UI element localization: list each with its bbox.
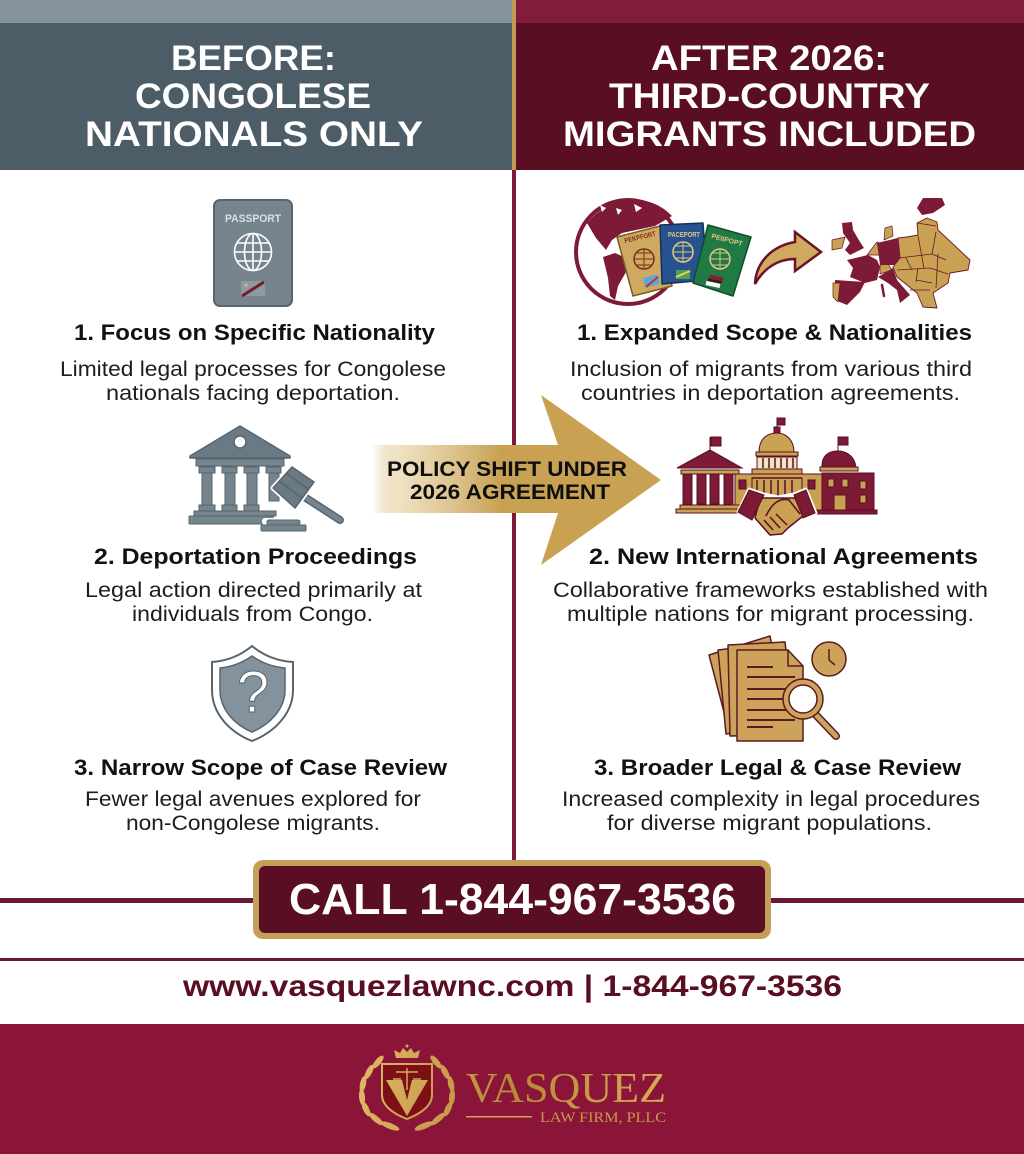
arrow label: 2026 AGREEMENT [410,481,610,504]
icon: government buildings and handshake [676,418,877,536]
text block: deportation proceedings: individuals from Congo. [132,603,373,626]
icon: globe with passports [576,200,751,304]
icon: europe map [832,198,970,308]
logo: wordmark: LAW FIRM, PLLC [540,1110,666,1126]
passport: blue: PACEPORT [668,232,701,239]
text block: deportation proceedings [85,544,422,626]
panel: before header [0,0,512,170]
passport: gold: PEKPFORT [624,231,657,245]
text block: new international agreements: 2. New International Agreements [589,544,978,569]
passport: green: PEIIPOPT [710,233,744,248]
arrow label: POLICY SHIFT UNDER [387,458,627,481]
heading: before: NATIONALS ONLY [85,115,423,154]
text block: broader legal and case review: for diverse migrant populations. [607,812,932,835]
text block: narrow scope of case review [74,755,448,835]
text block: expanded scope: 1. Expanded Scope & Nationalities [577,320,972,345]
heading: after [563,39,976,154]
logo: crest [358,1044,456,1133]
text block: deportation proceedings: Legal action directed primarily at [85,579,422,602]
heading: before: CONGOLESE [135,77,371,116]
text block: narrow scope of case review: Fewer legal avenues explored for [85,788,421,811]
text block: focus on specific nationality: 1. Focus on Specific Nationality [74,320,436,345]
arrow: policy shift [372,395,661,565]
icon: documents, clock and magnifier [709,636,846,741]
passport: blue [660,223,707,284]
text block: focus on specific nationality: Limited legal processes for Congolese [60,358,446,381]
call to action button [253,860,771,939]
passport: green [693,225,751,296]
text block: narrow scope of case review: non-Congolese migrants. [126,812,380,835]
text block: broader legal and case review: Increased complexity in legal procedures [562,788,980,811]
text block: narrow scope of case review: 3. Narrow Scope of Case Review [74,755,448,780]
panel: after header [516,0,1024,170]
text block: broader legal and case review: 3. Broader Legal & Case Review [594,755,962,780]
right building [815,437,877,514]
handshake [738,489,816,536]
footer band [0,1024,1024,1154]
icon: shield with question mark: ? [237,660,269,725]
text block: new international agreements: multiple nations for migrant processing. [567,603,974,626]
heading: after: MIGRANTS INCLUDED [563,115,976,154]
text block: expanded scope: countries in deportation agreements. [581,382,960,405]
icon: grey passport: PASSPORT [225,213,281,225]
text block: expanded scope: Inclusion of migrants from various third [570,358,972,381]
heading: before [85,39,423,154]
text block: new international agreements [553,544,988,626]
call to action button: CALL 1-844-967-3536 [289,875,736,924]
passport: gold [617,226,672,296]
contact line: www.vasquezlawnc.com | 1-844-967-3536 [182,970,842,1003]
text block: focus on specific nationality [60,320,446,405]
arrow label [387,458,627,504]
text block: deportation proceedings: 2. Deportation Proceedings [94,544,417,569]
icon: courthouse and gavel [189,426,340,531]
text block: new international agreements: Collaborative frameworks established with [553,579,988,602]
left building [676,437,744,513]
capitol dome [752,418,802,508]
icon: shield with question mark [212,646,293,741]
heading: before: BEFORE: [171,39,336,78]
heading: after: THIRD-COUNTRY [609,77,930,116]
magnifier [783,679,836,736]
text block: expanded scope [570,320,972,405]
icon: curved arrow [755,232,821,284]
text block: focus on specific nationality: nationals facing deportation. [106,382,400,405]
icon: grey passport [214,200,292,306]
heading: after: AFTER 2026: [651,39,887,78]
logo: wordmark: VASQUEZ [466,1066,666,1112]
clock [812,642,846,676]
text block: broader legal and case review [562,755,980,835]
